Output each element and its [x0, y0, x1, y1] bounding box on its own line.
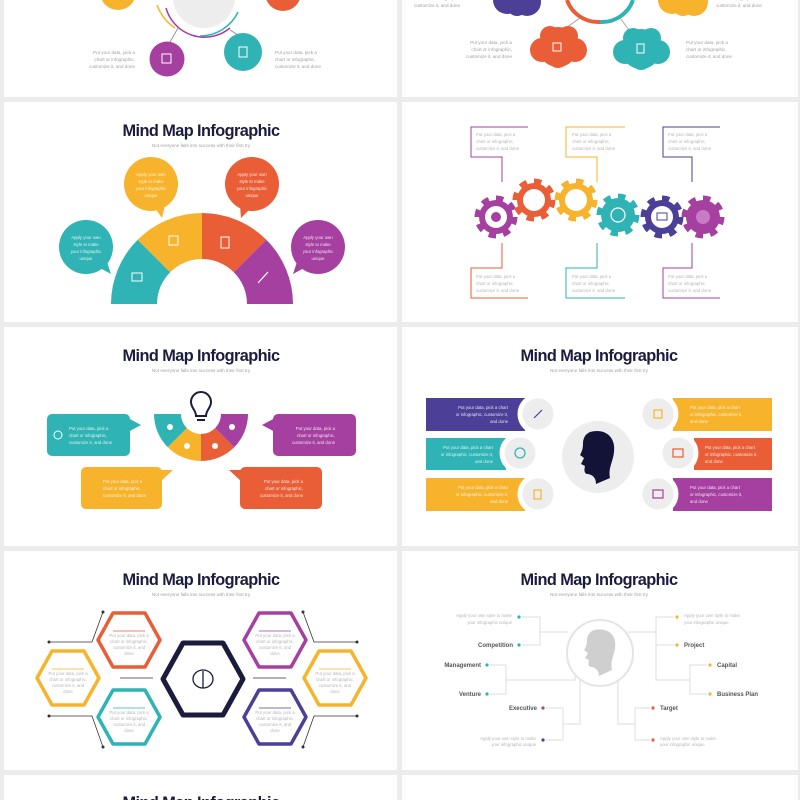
bubbles: your infographic: [303, 249, 334, 254]
title: Mind Map Infographic: [520, 346, 678, 365]
small hexagons: [37, 613, 366, 744]
panel: hexagons: chart or infographic,: [110, 716, 148, 721]
bars: and done: [690, 499, 709, 504]
panel: hexagons: chart or infographic,: [256, 716, 294, 721]
labels: your infographic unique: [491, 742, 537, 747]
panel: hexagons: done: [330, 689, 340, 694]
bars: or infographic, customize it,: [690, 412, 742, 417]
callouts: customize it, and done: [260, 493, 304, 498]
panel: gears: Put your data, pick a: [668, 274, 708, 279]
texts: customize it, and done: [414, 3, 460, 8]
top brackets: [471, 127, 720, 298]
bubbles: style to make: [73, 242, 99, 247]
bars: and done: [490, 499, 509, 504]
labels: [444, 613, 758, 747]
callouts: Put your data, pick a: [69, 426, 109, 431]
bars: Put your data, pick a chart: [690, 405, 741, 410]
panel: hexagons: chart or infographic,: [110, 639, 148, 644]
callouts: Put your data, pick a: [264, 479, 304, 484]
title: Mind Map Infographic: [520, 570, 678, 589]
callouts: chart or infographic,: [69, 433, 107, 438]
panel: top-right partial clouds: chart or infographic,: [686, 47, 727, 52]
labels: Apply your own style to make: [684, 613, 740, 618]
labels: Project: [684, 643, 704, 649]
title: Mind Map Infographic: [122, 570, 280, 589]
subtitle: Not everyone falls into success with their first try: [152, 143, 251, 148]
half donut chart: [111, 213, 293, 304]
semicircle chart: [154, 414, 248, 461]
labels: Apply your own style to make: [456, 613, 513, 618]
bubbles: your infographic: [136, 186, 167, 191]
panel: bottom partial: [4, 775, 798, 800]
labels: Management: [444, 663, 481, 669]
labels: your infographic unique: [660, 742, 705, 747]
panel: hexagons: Put your data, pick a: [255, 710, 295, 715]
bubbles: unique: [145, 193, 158, 198]
panel: gears: chart or infographic,: [572, 281, 610, 286]
panel: hexagons: done: [270, 651, 280, 656]
panel: gears: chart or infographic,: [572, 139, 610, 144]
panel: top-right partial clouds: Put your data, pick a: [470, 40, 512, 45]
panel: gears: Put your data, pick a: [572, 274, 612, 279]
panel: half donut: [4, 102, 397, 322]
bubbles: unique: [246, 193, 259, 198]
bars: Put your data, pick a chart: [705, 445, 756, 450]
panel: gears: customize it, and done: [572, 288, 616, 293]
panel: hexagons: done: [270, 728, 280, 733]
bars: or infographic, customize it,: [456, 412, 508, 417]
panel: hexagons: done: [63, 689, 73, 694]
callouts: customize it, and done: [69, 440, 113, 445]
panel: hexagons: customize it, and: [52, 683, 85, 688]
icon: brain: [193, 670, 213, 688]
callouts: customize it, and done: [103, 493, 147, 498]
bubbles: unique: [80, 256, 93, 261]
bracket texts: chart or infographic,: [476, 139, 514, 144]
clouds: [493, 0, 541, 16]
bubbles: style to make: [239, 179, 265, 184]
icon circles: [502, 396, 696, 512]
head circle: [562, 421, 634, 493]
panel: hexagons: Put your data, pick a: [48, 671, 88, 676]
panel: hexagons: Put your data, pick a: [315, 671, 355, 676]
text blocks: customize it, and done: [89, 64, 135, 69]
panel: gears: chart or infographic,: [476, 281, 514, 286]
icon: light bulb: [191, 392, 211, 420]
bars: [426, 398, 772, 511]
panel: hexagons: chart or infographic,: [316, 677, 354, 682]
panel: hexagons: done: [124, 728, 134, 733]
panel: hexagons: customize it, and: [259, 722, 292, 727]
panel: top-left partial: [4, 0, 397, 97]
bars: or infographic, customize it,: [690, 492, 742, 497]
dots: [485, 615, 712, 742]
labels: your infographic unique: [684, 620, 729, 625]
bubbles: Apply your own: [237, 172, 267, 177]
labels: Business Plan: [717, 692, 758, 698]
callouts: customize it, and done: [292, 440, 336, 445]
panel: hexagons: customize it, and: [113, 722, 146, 727]
labels: Apply your own style to make: [480, 736, 537, 741]
panel: top-right partial clouds: customize it, and done: [716, 3, 762, 8]
panel: gears: customize it, and done: [476, 288, 520, 293]
panel: hexagons: customize it, and: [319, 683, 352, 688]
bubbles: unique: [312, 256, 325, 261]
panel: hexagons: Put your data, pick a: [255, 633, 295, 638]
bubbles: Apply your own: [303, 235, 333, 240]
bars: Put your data, pick a chart: [458, 405, 509, 410]
callouts: Put your data, pick a: [103, 479, 143, 484]
panel: hexagons: customize it, and: [113, 645, 146, 650]
labels: your infographic unique: [467, 620, 513, 625]
panel: gears: customize it, and done: [668, 288, 712, 293]
panel: hexagons: chart or infographic,: [49, 677, 87, 682]
panel: top-left partial: customize it, and done: [275, 64, 321, 69]
bars: and done: [690, 419, 709, 424]
panel: head with bars: [402, 327, 798, 546]
hexagon center: [163, 643, 243, 715]
panel: gears: Put your data, pick a: [668, 132, 708, 137]
panel: gears: [402, 102, 798, 322]
subtitle: Not everyone falls into success with their first try: [152, 368, 251, 373]
subtitle: Not everyone falls into success with their first try: [550, 368, 649, 373]
panel: hexagons: [4, 551, 397, 770]
gears row: [477, 181, 722, 236]
bubbles: style to make: [138, 179, 164, 184]
panel: head labels: [402, 551, 798, 770]
labels: Venture: [459, 692, 482, 698]
bars: or infographic, customize it,: [456, 492, 508, 497]
bars: and done: [705, 459, 724, 464]
bubbles: style to make: [305, 242, 331, 247]
panel: top-right partial clouds: [402, 0, 798, 97]
circles: [100, 0, 136, 10]
bracket texts: customize it, and done: [476, 146, 520, 151]
panel: gears: Put your data, pick a: [572, 132, 612, 137]
panel: gears: chart or infographic,: [668, 139, 706, 144]
panel: top-left partial: chart or infographic,: [275, 57, 316, 62]
bubbles: Apply your own: [136, 172, 166, 177]
bars: Put your data, pick a chart: [690, 485, 741, 490]
bubbles: your infographic: [237, 186, 268, 191]
callouts: chart or infographic,: [297, 433, 335, 438]
callouts: chart or infographic,: [265, 486, 303, 491]
panel: gears: customize it, and done: [572, 146, 616, 151]
bars: Put your data, pick a chart: [458, 485, 509, 490]
bracket texts: Put your data, pick a: [476, 132, 516, 137]
labels: Capital: [717, 663, 737, 669]
connector lines: [49, 612, 357, 747]
bars: or infographic, customize it,: [705, 452, 757, 457]
panel: gears: customize it, and done: [668, 146, 712, 151]
panel: hexagons: Put your data, pick a: [109, 633, 149, 638]
labels: Executive: [509, 706, 538, 712]
bars: and done: [475, 459, 494, 464]
text blocks: Put your data, pick a: [93, 50, 135, 55]
bubbles: [59, 157, 345, 274]
panel: top-right partial clouds: chart or infographic,: [471, 47, 512, 52]
head circle: [567, 620, 633, 686]
panel: gears: chart or infographic,: [668, 281, 706, 286]
bubbles: your infographic: [71, 249, 102, 254]
title: Mind Map Infographic: [122, 121, 280, 140]
text blocks: chart or infographic,: [94, 57, 135, 62]
panel: hexagons: done: [124, 651, 134, 656]
panel: top-left partial: Put your data, pick a: [275, 50, 317, 55]
callouts: Put your data, pick a: [296, 426, 336, 431]
connectors: [490, 617, 707, 740]
bars: or infographic, customize it,: [441, 452, 493, 457]
panel: top-right partial clouds: Put your data, pick a: [686, 40, 728, 45]
panel: top-right partial clouds: customize it, and done: [466, 54, 512, 59]
ring: [567, 0, 633, 22]
labels: Competition: [478, 643, 513, 649]
subtitle: Not everyone falls into success with their first try: [152, 592, 251, 597]
bars: and done: [490, 419, 509, 424]
labels: Apply your own style to make: [660, 736, 716, 741]
callouts: chart or infographic,: [103, 486, 141, 491]
title: Mind Map Infographic: [122, 346, 280, 365]
panel: top-right partial clouds: customize it, and done: [686, 54, 732, 59]
bubbles: Apply your own: [71, 235, 101, 240]
bars: Put your data, pick a chart: [443, 445, 494, 450]
panel: hexagons: Put your data, pick a: [109, 710, 149, 715]
labels: Target: [660, 706, 678, 712]
panel: hexagons: customize it, and: [259, 645, 292, 650]
panel: hexagons: chart or infographic,: [256, 639, 294, 644]
subtitle: Not everyone falls into success with their first try: [550, 592, 649, 597]
panel: semicircle bulb: [4, 327, 397, 546]
central circle with arcs: [157, 0, 238, 42]
panel: gears: Put your data, pick a: [476, 274, 516, 279]
callouts: [47, 414, 356, 509]
